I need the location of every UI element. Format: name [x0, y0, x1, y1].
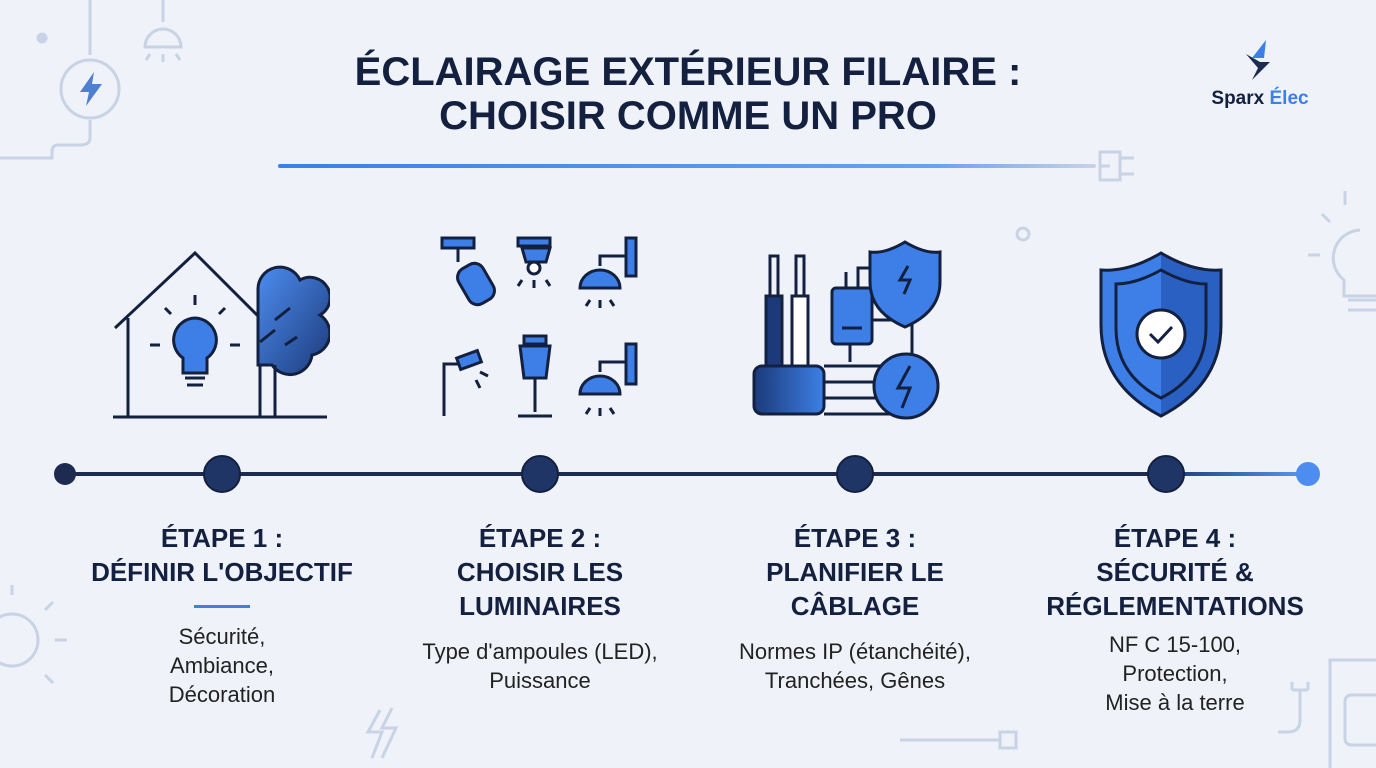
step 1: DÉFINIR L'OBJECTIF [91, 557, 353, 587]
icon: luminaires [440, 236, 638, 418]
step 3: Normes IP (étanchéité), [739, 639, 971, 664]
step 3: PLANIFIER LE [766, 557, 944, 587]
step 4 [1046, 523, 1304, 715]
step 3 [739, 523, 971, 693]
step 4: ÉTAPE 4 : [1114, 523, 1236, 553]
step 3: ÉTAPE 3 : [794, 523, 916, 553]
step 4: SÉCURITÉ & [1096, 557, 1254, 587]
step 3: CÂBLAGE [791, 591, 919, 621]
timeline [54, 455, 1320, 493]
logo [1211, 40, 1309, 109]
step 4: NF C 15-100, [1109, 632, 1241, 657]
step 1: Ambiance, [170, 653, 274, 678]
title: CHOISIR COMME UN PRO [439, 94, 937, 138]
step 2: CHOISIR LES [457, 557, 623, 587]
title: ÉCLAIRAGE EXTÉRIEUR FILAIRE : [355, 50, 1021, 94]
step 2: Type d'ampoules (LED), [422, 639, 658, 664]
step 4: Mise à la terre [1105, 690, 1245, 715]
title [355, 50, 1021, 138]
step 2: Puissance [489, 668, 591, 693]
step 1: ÉTAPE 1 : [161, 523, 283, 553]
icon: bolt in circle (top-left) [80, 72, 102, 106]
step 1: Décoration [169, 682, 275, 707]
step 1 [91, 523, 353, 707]
title underline [278, 164, 1096, 168]
step 2 [422, 523, 658, 693]
step 2: ÉTAPE 2 : [479, 523, 601, 553]
step 1: Sécurité, [179, 624, 265, 649]
step 2: LUMINAIRES [459, 591, 621, 621]
step 4: RÉGLEMENTATIONS [1046, 591, 1304, 621]
icon: house with bulb and tree [113, 250, 330, 418]
step 4: Protection, [1122, 661, 1228, 686]
logo: Sparx Élec [1211, 88, 1309, 109]
icon: cables [752, 240, 942, 420]
icon: shield [1100, 251, 1222, 418]
step 3: Tranchées, Gênes [765, 668, 945, 693]
